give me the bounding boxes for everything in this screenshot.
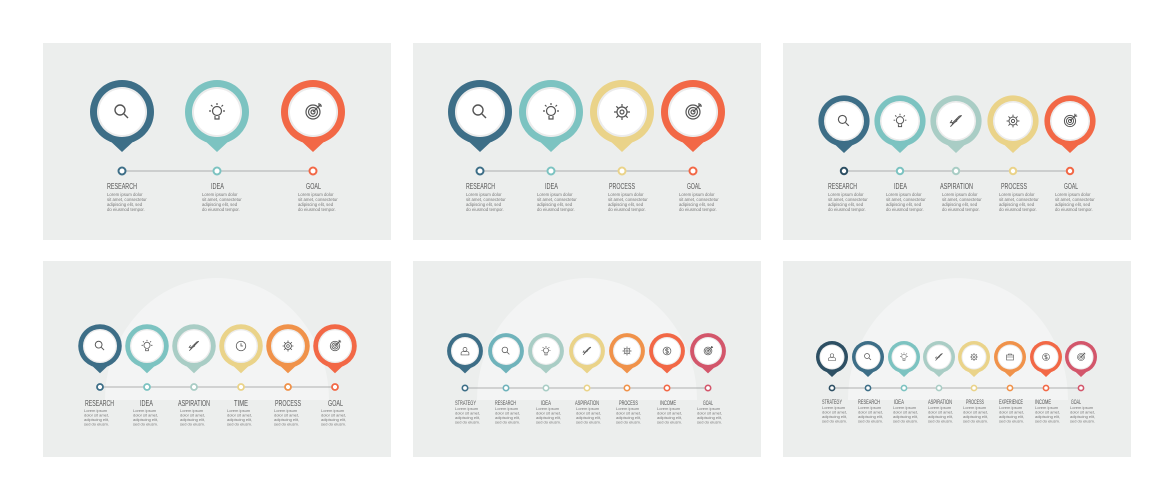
labels: GOAL: [687, 182, 701, 191]
pin: strategy: [816, 341, 848, 377]
labels: ASPIRATION: [575, 400, 599, 407]
panel: 5 steps: [783, 43, 1131, 240]
pin: process: [958, 341, 990, 377]
labels: GOAL: [1064, 182, 1078, 191]
labels: RESEARCH: [107, 182, 137, 191]
pin: process: [590, 80, 654, 152]
pin: idea: [888, 341, 920, 377]
pin: aspiration: [569, 333, 605, 373]
labels: IDEA: [211, 182, 224, 191]
pin: time: [219, 324, 263, 373]
labels: IDEA: [545, 182, 558, 191]
panel: 3 steps: [43, 43, 391, 240]
labels: STRATEGY: [455, 400, 476, 407]
pin: income: [649, 333, 685, 373]
panel: 7 steps: [413, 261, 761, 457]
labels: RESEARCH: [828, 182, 857, 191]
pin: idea: [125, 324, 169, 373]
pin: goal: [1065, 341, 1097, 377]
labels: [107, 182, 338, 212]
pin: experience: [994, 341, 1026, 377]
globe: [477, 278, 697, 400]
panel: 4 steps: [413, 43, 761, 240]
labels: GOAL: [703, 400, 713, 407]
pin: idea: [528, 333, 564, 373]
pin: goal: [313, 324, 357, 373]
labels: RESEARCH: [466, 182, 495, 191]
labels: [822, 399, 1095, 424]
labels: INCOME: [660, 400, 676, 407]
labels: INCOME: [1035, 399, 1051, 406]
labels: PROCESS: [619, 400, 638, 407]
labels: TIME: [234, 399, 248, 408]
labels: PROCESS: [609, 182, 635, 191]
pin: research: [78, 324, 122, 373]
globe: [105, 278, 329, 400]
pin: goal: [281, 80, 345, 152]
labels: IDEA: [541, 400, 551, 407]
pin: goal: [661, 80, 725, 152]
labels: GOAL: [306, 182, 321, 191]
labels: IDEA: [140, 399, 153, 408]
globe: [848, 278, 1068, 400]
pin: research: [852, 341, 884, 377]
labels: RESEARCH: [85, 399, 114, 408]
labels: ASPIRATION: [940, 182, 973, 191]
labels: [828, 182, 1095, 212]
panel: 8 steps: [783, 261, 1131, 457]
pin: idea: [185, 80, 249, 152]
labels: PROCESS: [275, 399, 301, 408]
pin: idea: [874, 95, 926, 153]
labels: GOAL: [1071, 399, 1081, 406]
pin: idea: [519, 80, 583, 152]
labels: PROCESS: [966, 399, 984, 406]
pin: goal: [1044, 95, 1096, 153]
labels: ASPIRATION: [178, 399, 210, 408]
pin: aspiration: [923, 341, 955, 377]
panel: 6 steps: [43, 261, 391, 457]
labels: IDEA: [894, 399, 904, 406]
pin: research: [90, 80, 154, 152]
pin: goal: [690, 333, 726, 373]
pin: process: [987, 95, 1039, 153]
labels: [84, 399, 346, 426]
pin: aspiration: [930, 95, 982, 153]
pin: research: [448, 80, 512, 152]
labels: GOAL: [328, 399, 343, 408]
pin: research: [488, 333, 524, 373]
pin: aspiration: [172, 324, 216, 373]
labels: ASPIRATION: [928, 399, 952, 406]
pin: strategy: [447, 333, 483, 373]
pin: research: [818, 95, 870, 153]
labels: IDEA: [894, 182, 907, 191]
labels: EXPERIENCE: [999, 399, 1023, 406]
labels: PROCESS: [1001, 182, 1027, 191]
pin: process: [609, 333, 645, 373]
labels: [455, 400, 722, 424]
pin: process: [266, 324, 310, 373]
labels: RESEARCH: [495, 400, 516, 407]
labels: RESEARCH: [858, 399, 880, 406]
labels: [466, 182, 719, 212]
pin: income: [1030, 341, 1062, 377]
labels: STRATEGY: [822, 399, 842, 406]
